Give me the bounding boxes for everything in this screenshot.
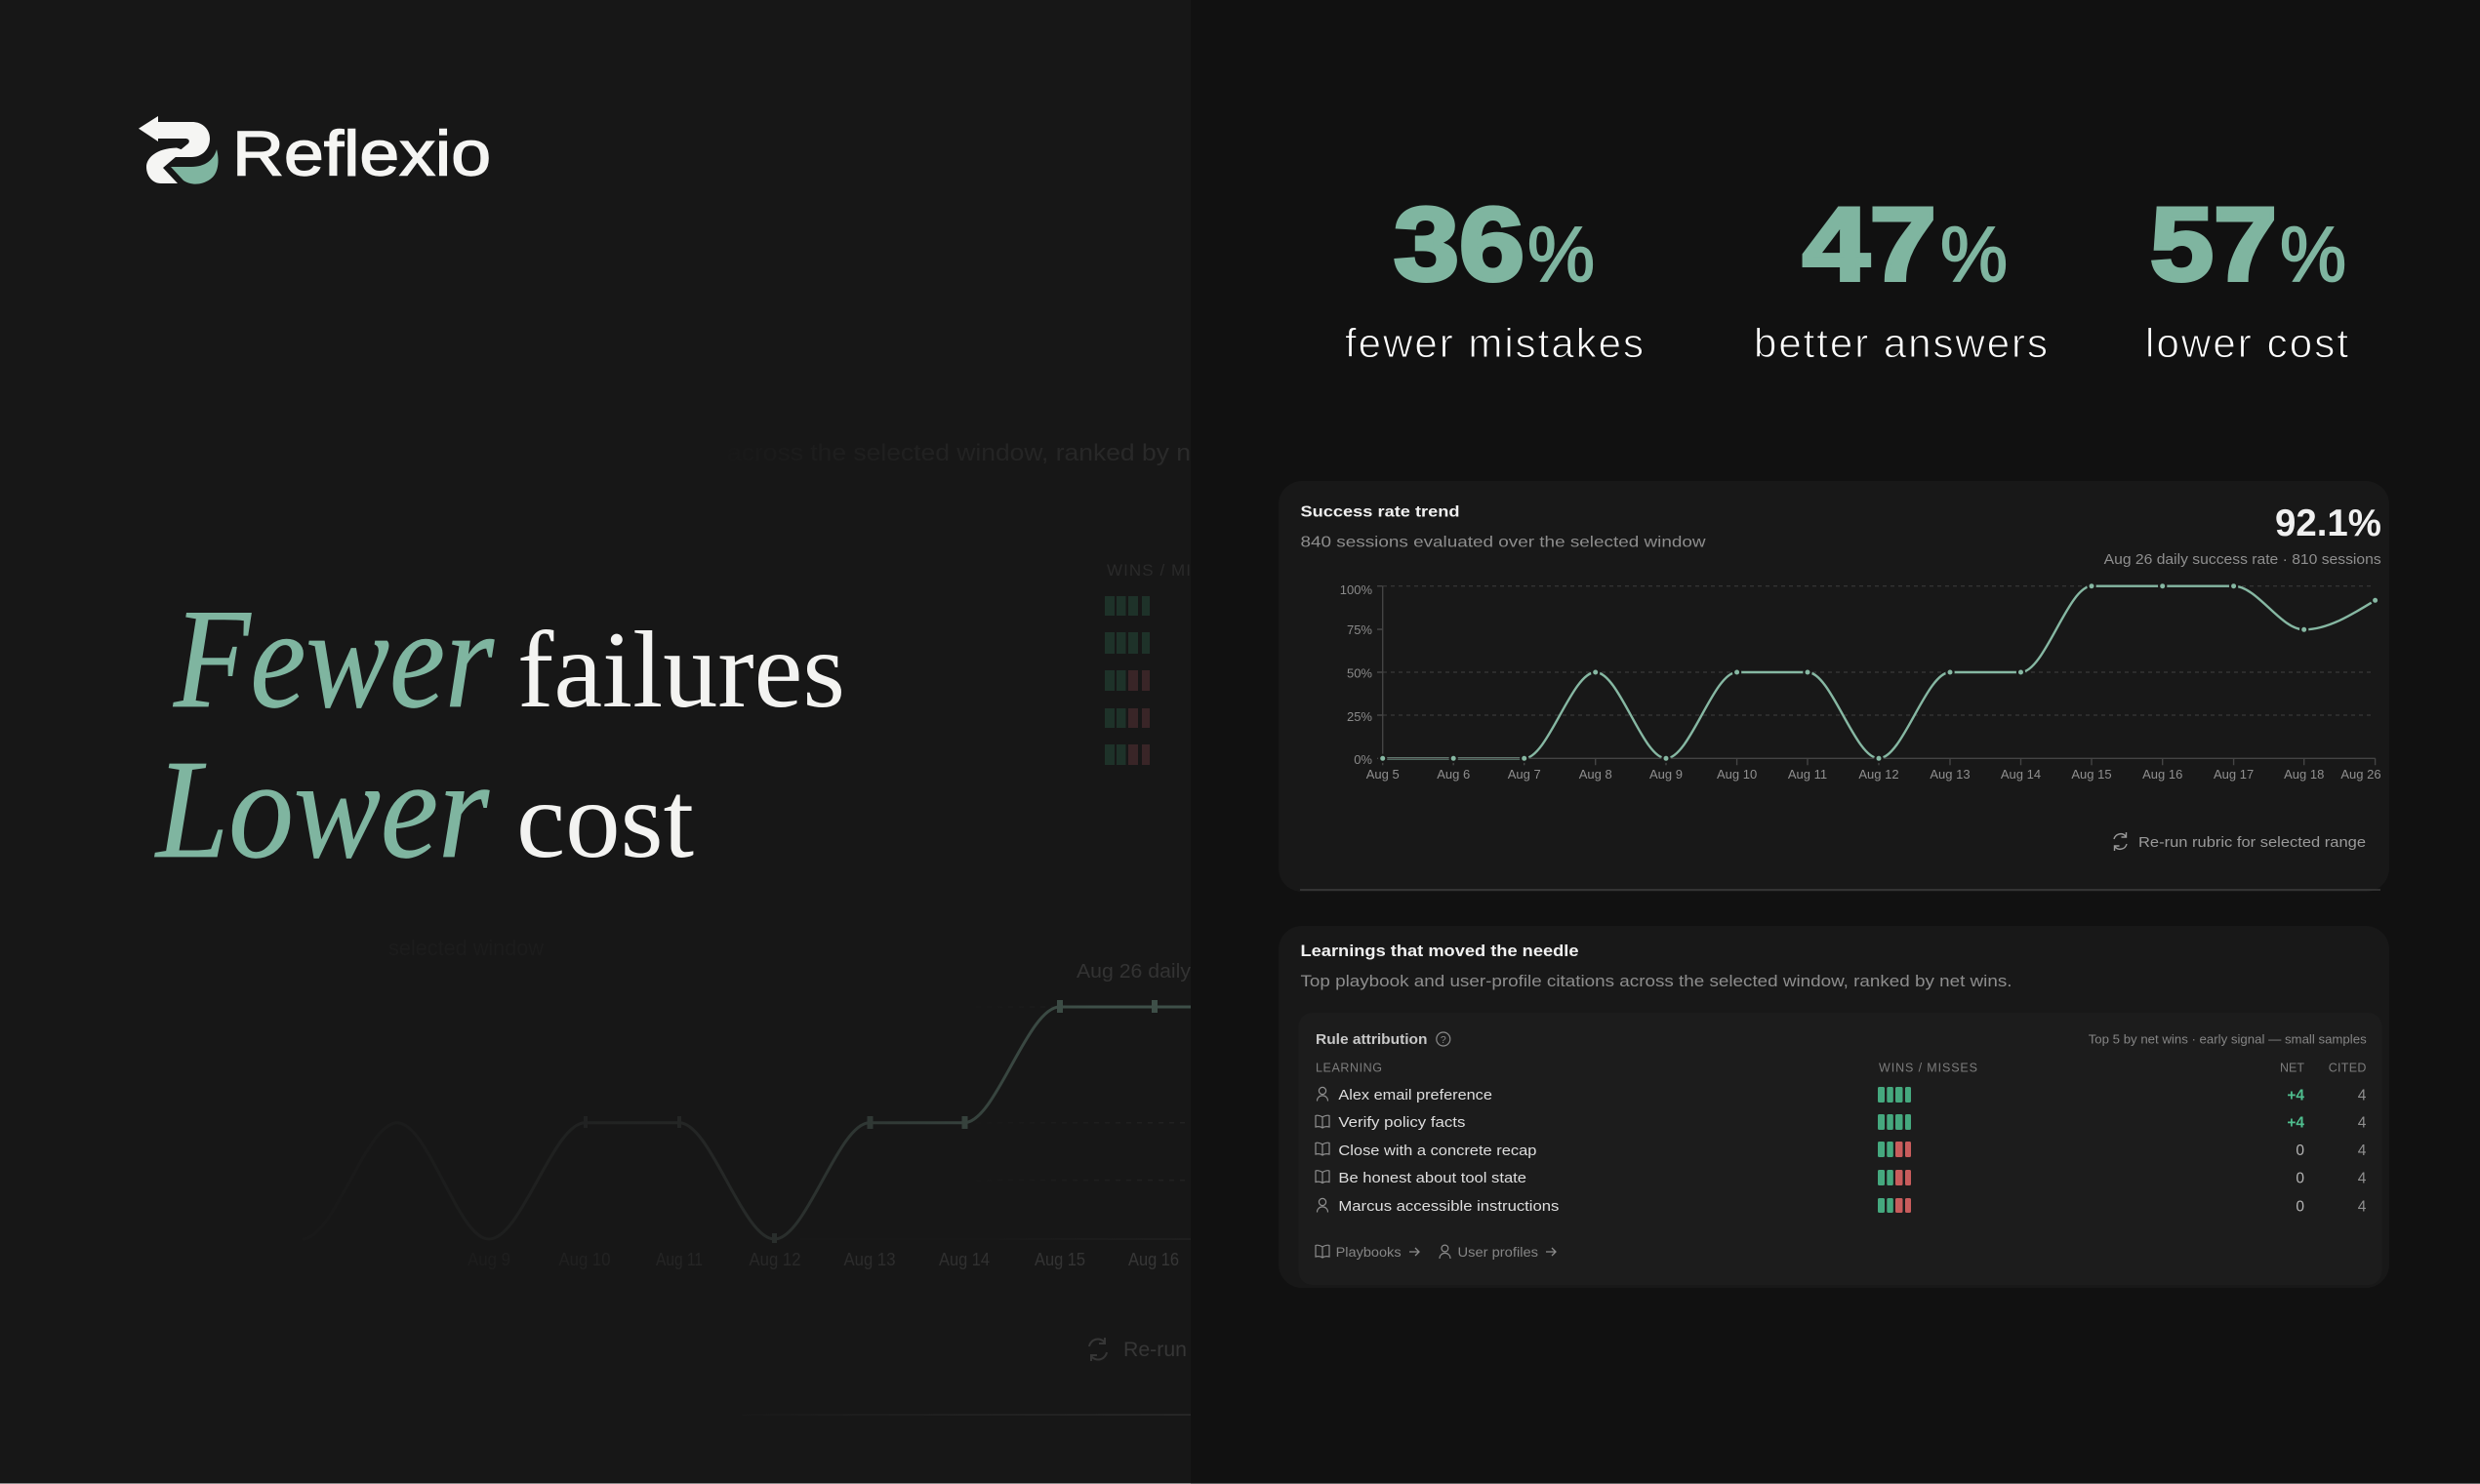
headline line 1 [173,580,845,738]
x axis labels [1366,767,2381,782]
row: Marcus accessible instructions: 4 [2358,1198,2367,1216]
row: Verify policy facts: Verify policy facts [1338,1114,1465,1131]
ghost dashboard backdrop: Aug 12 [750,1250,800,1269]
x axis labels: Aug 6 [1437,767,1470,782]
row: Alex email preference: Alex email preference [1338,1087,1492,1103]
card subtitle: Top playbook and user-profile citations across the selected window, ranked by net wins. [1300,972,2012,990]
stat: 36% fewer mistakes: 36 [1394,185,1525,302]
row: Alex email preference [1318,1087,2367,1104]
x axis labels: Aug 12 [1858,767,1899,782]
row: Marcus accessible instructions: Marcus accessible instructions [1338,1198,1559,1215]
current value: 92.1% [2275,502,2381,544]
ghost dashboard backdrop [303,440,1191,1415]
stat: 57% lower cost: 57 [2150,185,2277,302]
row: Close with a concrete recap [1316,1142,2367,1159]
top 5 note: Top 5 by net wins · early signal — small samples [2089,1032,2367,1046]
stat: 47% better answers [1754,185,2048,366]
link: user profiles [1440,1245,1556,1260]
ghost dashboard backdrop: Aug 13 [843,1250,896,1269]
row: Be honest about tool state: Be honest about tool state [1338,1170,1526,1186]
link: playbooks [1316,1245,1419,1260]
row: Marcus accessible instructions: 0 [2296,1198,2304,1216]
link: playbooks: Playbooks [1336,1245,1402,1260]
wordmark: Reflexio [232,117,491,188]
ghost dashboard backdrop: WINS / MI [1107,561,1191,580]
logo [139,116,491,188]
headline line 2: cost [516,760,694,881]
stat: 47% better answers: 47 [1803,185,1936,302]
stat: 36% fewer mistakes: fewer mistakes [1345,320,1644,366]
column headers: NET [2280,1062,2304,1075]
ghost dashboard backdrop: Aug 11 [656,1250,703,1269]
line chart: success rate [1340,582,2381,782]
stat: 57% lower cost [2145,185,2348,366]
x axis labels: Aug 7 [1508,767,1541,782]
row: Close with a concrete recap: 4 [2358,1143,2367,1159]
row: Be honest about tool state [1316,1170,2367,1186]
re-run action: Re-run rubric for selected range [2138,834,2366,851]
x axis labels: Aug 10 [1717,767,1757,782]
link: user profiles: User profiles [1458,1245,1538,1260]
current value caption: Aug 26 daily success rate · 810 sessions [2104,552,2381,568]
row: Marcus accessible instructions [1318,1198,2367,1216]
row: Verify policy facts: 4 [2358,1114,2367,1132]
ghost dashboard backdrop: Aug 9 [468,1250,510,1269]
panel: success rate trend [1279,481,2389,892]
row: Be honest about tool state: 4 [2358,1171,2367,1186]
ghost dashboard backdrop: Re-run [1123,1339,1187,1361]
y axis labels: 50% [1347,665,1372,681]
ghost dashboard backdrop: Aug 26 daily [1077,961,1191,983]
icon: help [1437,1032,1450,1046]
row: Close with a concrete recap: Close with a concrete recap [1338,1143,1536,1159]
panel: learnings that moved the needle [1279,926,2389,1288]
ghost dashboard backdrop: Aug 14 [939,1250,990,1269]
x axis labels: Aug 15 [2071,767,2112,782]
ghost dashboard backdrop: Aug 16 [1128,1250,1179,1269]
icon: Reflexio mark [139,116,219,184]
rule attribution heading: Rule attribution [1316,1031,1427,1048]
card title: Success rate trend [1300,503,1460,521]
x axis labels: Aug 13 [1930,767,1971,782]
column headers: LEARNING [1316,1062,1382,1075]
ghost dashboard backdrop: across the selected window, ranked by n [727,440,1191,466]
headline line 1: failures [517,610,845,731]
ghost dashboard backdrop: Aug 15 [1035,1250,1085,1269]
x axis labels: Aug 18 [2284,767,2324,782]
row: Verify policy facts: +4 [2287,1114,2304,1132]
stat: 57% lower cost: % [2280,211,2346,298]
x axis labels: Aug 5 [1366,767,1400,782]
stat: 36% fewer mistakes [1345,185,1644,366]
card subtitle: 840 sessions evaluated over the selected window [1300,535,1706,550]
panel: left background [0,0,1191,1484]
x axis labels: Aug 16 [2142,767,2182,782]
row: Alex email preference: 4 [2358,1087,2367,1104]
x axis labels: Aug 8 [1579,767,1612,782]
row: Verify policy facts [1316,1114,2367,1132]
icon: help: ? [1441,1034,1446,1046]
x axis labels: Aug 9 [1649,767,1683,782]
column headers [1316,1062,2366,1075]
stat: 47% better answers: % [1940,211,2008,298]
stat: 36% fewer mistakes: % [1527,211,1595,298]
y axis labels: 25% [1347,709,1372,724]
stat: 47% better answers: better answers [1754,320,2048,366]
y axis labels: 75% [1347,622,1372,637]
ghost dashboard backdrop: selected window [388,936,544,960]
row: Alex email preference: +4 [2287,1087,2304,1104]
x axis labels: Aug 26 [2340,767,2381,782]
panel: rule attribution [1298,1013,2381,1285]
ghost dashboard backdrop: Aug 10 [558,1250,611,1269]
y axis labels [1340,582,1372,767]
x axis labels: Aug 14 [2001,767,2041,782]
column headers: CITED [2329,1062,2366,1075]
headline line 2: Lower [154,732,490,888]
headline line 1: Fewer [173,580,495,738]
headline line 2 [154,732,694,888]
row: Close with a concrete recap: 0 [2296,1143,2304,1159]
x axis labels: Aug 11 [1788,767,1827,782]
y axis labels: 0% [1354,752,1372,767]
headline [154,580,845,888]
y axis labels: 100% [1340,582,1372,597]
icon: refresh [2114,832,2127,851]
card title: Learnings that moved the needle [1300,942,1579,960]
panel: right background [1191,0,2480,1484]
stat: 57% lower cost: lower cost [2145,320,2348,366]
x axis labels: Aug 17 [2214,767,2254,782]
column headers: WINS / MISSES [1879,1062,1977,1075]
row: Be honest about tool state: 0 [2296,1171,2304,1186]
